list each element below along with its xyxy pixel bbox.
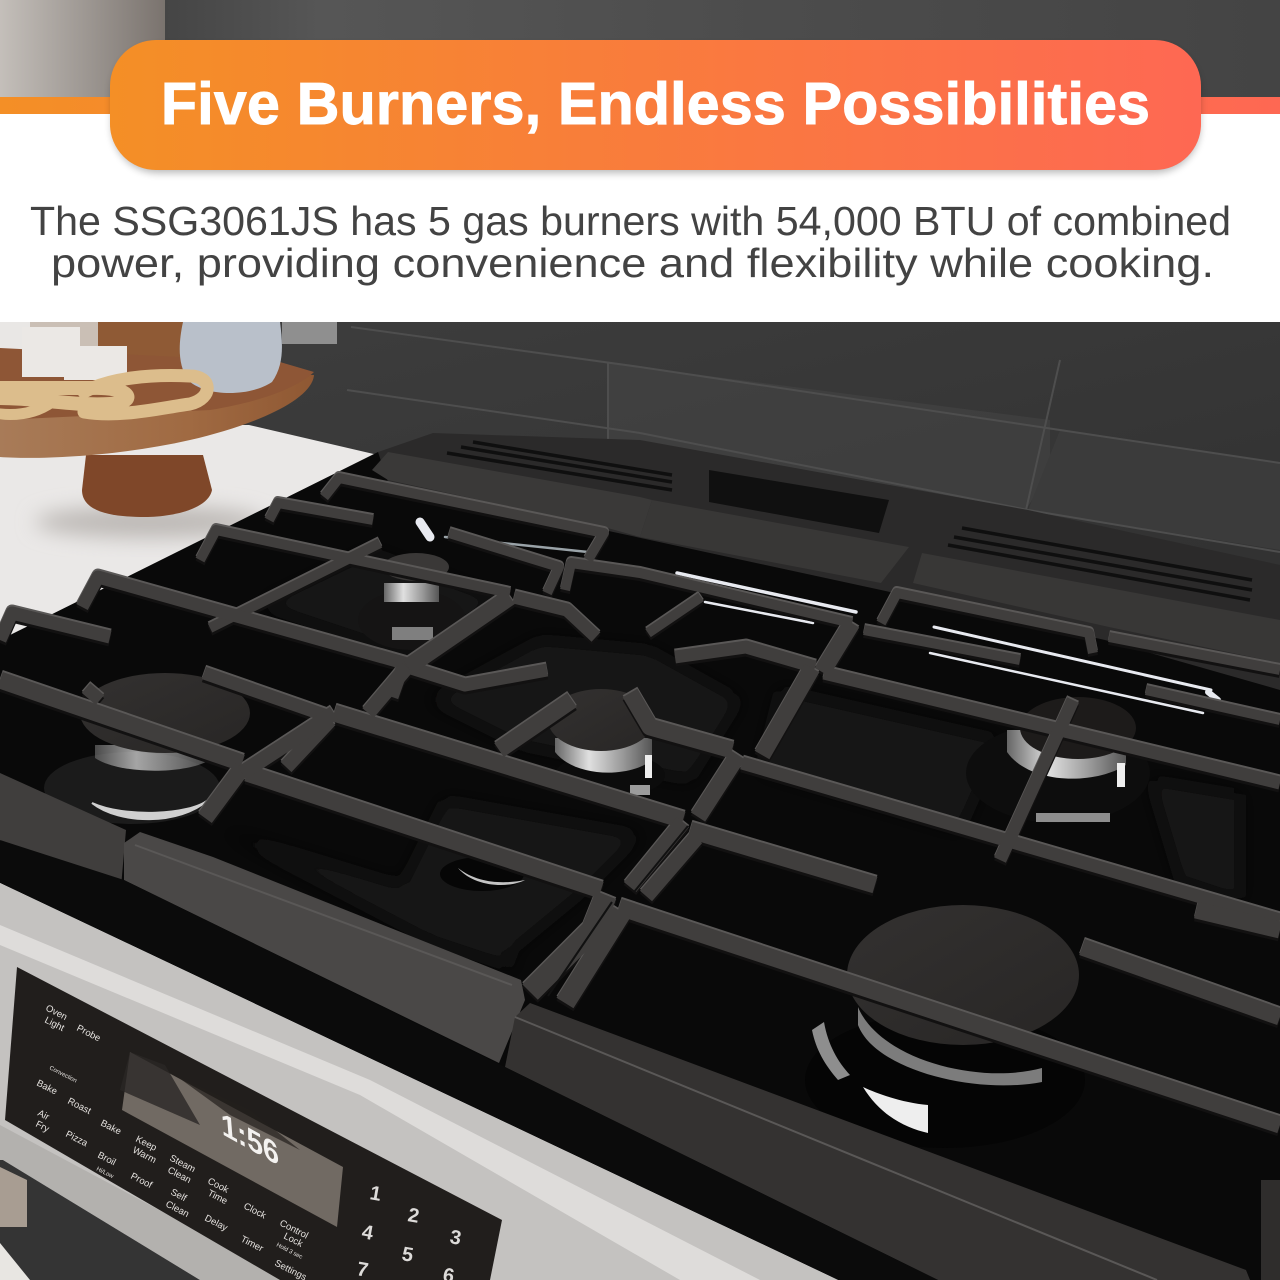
control labels: Air: [36, 1108, 51, 1123]
white cups: [22, 327, 127, 380]
control labels: Clean: [164, 1199, 191, 1220]
keypad digits: 2: [406, 1204, 421, 1228]
burner: front right: [805, 905, 1085, 1148]
wooden chain links: [0, 376, 207, 414]
heading pill: [110, 40, 1201, 173]
grate shadow: [0, 481, 1280, 1128]
control labels: Keep: [134, 1134, 158, 1154]
control labels: Control: [278, 1218, 310, 1242]
control labels: Convection: [48, 1065, 78, 1084]
front bar creases: [135, 845, 1157, 1280]
decor background: [0, 322, 337, 372]
control labels: Bake: [35, 1078, 59, 1098]
counter: [0, 425, 378, 642]
control labels: Fry: [34, 1119, 51, 1135]
keypad digits: 5: [400, 1243, 415, 1267]
control labels: Oven: [44, 1003, 69, 1023]
control labels: Lock: [282, 1231, 305, 1250]
photo: kitchen scene: [0, 322, 1280, 1280]
control labels: Timer: [239, 1234, 265, 1255]
grate bars: [0, 478, 1280, 1125]
description text: [30, 198, 1231, 286]
white text area: [0, 114, 1280, 322]
control labels: Proof: [129, 1171, 154, 1191]
burner: back right: [966, 697, 1150, 823]
keypad digits: [355, 1182, 463, 1280]
control labels: Hi/Low: [95, 1166, 115, 1180]
control labels: Probe: [75, 1023, 102, 1044]
control labels: Time: [206, 1188, 229, 1207]
display window: [122, 1052, 343, 1227]
rear vent panels: [372, 433, 1280, 690]
ceramic jar: [180, 322, 282, 393]
title: Five Burners, Endless Possibilities: [161, 71, 1150, 137]
keypad digits: 1: [368, 1182, 383, 1206]
control labels: Clean: [166, 1165, 193, 1186]
front bar: right grate: [505, 1003, 1250, 1280]
chrome rail highlights: [420, 522, 1218, 713]
control panel: [5, 967, 502, 1280]
control labels: Broil: [96, 1150, 118, 1168]
control labels: Pizza: [64, 1129, 90, 1150]
control labels: Self: [169, 1187, 189, 1204]
clock display: 1:56: [220, 1105, 280, 1173]
burner: back left: [358, 553, 466, 650]
description text: power, providing convenience and flexibility while cooking.: [51, 240, 1214, 286]
cake stand: [0, 348, 314, 538]
top backdrop photo strip: [0, 0, 1280, 98]
range front trim: [0, 840, 938, 1280]
front bar: center grate: [124, 832, 525, 1063]
control labels: [34, 1003, 310, 1280]
control labels: Bake: [99, 1118, 123, 1138]
orange accent band: [0, 97, 1280, 114]
grate top edge: [0, 476, 1280, 1123]
cast-iron grates: [0, 476, 1280, 1128]
stainless steel range front: [0, 883, 838, 1280]
control labels: Steam: [168, 1153, 197, 1175]
control labels: Hold 3 sec: [275, 1242, 303, 1261]
glass reflections: [220, 552, 1240, 970]
control labels: Roast: [66, 1096, 93, 1117]
control labels: Warm: [131, 1145, 158, 1166]
control labels: Cook: [206, 1176, 231, 1196]
cooktop base glass: [0, 452, 1280, 1280]
steel highlight band: [0, 925, 760, 1280]
backsplash wall: [0, 322, 1280, 642]
control labels: Light: [43, 1015, 66, 1034]
burner: center front (mostly hidden): [440, 857, 525, 891]
burner: front left: [44, 673, 250, 824]
burner: center: [548, 689, 665, 797]
keypad digits: 4: [360, 1221, 376, 1245]
right edge bracket: [1261, 1180, 1280, 1280]
control labels: Clock: [242, 1201, 268, 1222]
front bar: left grate: [0, 773, 126, 887]
oven door and cloth: [0, 1125, 290, 1280]
description text: The SSG3061JS has 5 gas burners with 54,000 BTU of combined: [30, 198, 1231, 244]
keypad digits: 3: [448, 1226, 463, 1250]
control labels: Delay: [203, 1213, 229, 1234]
